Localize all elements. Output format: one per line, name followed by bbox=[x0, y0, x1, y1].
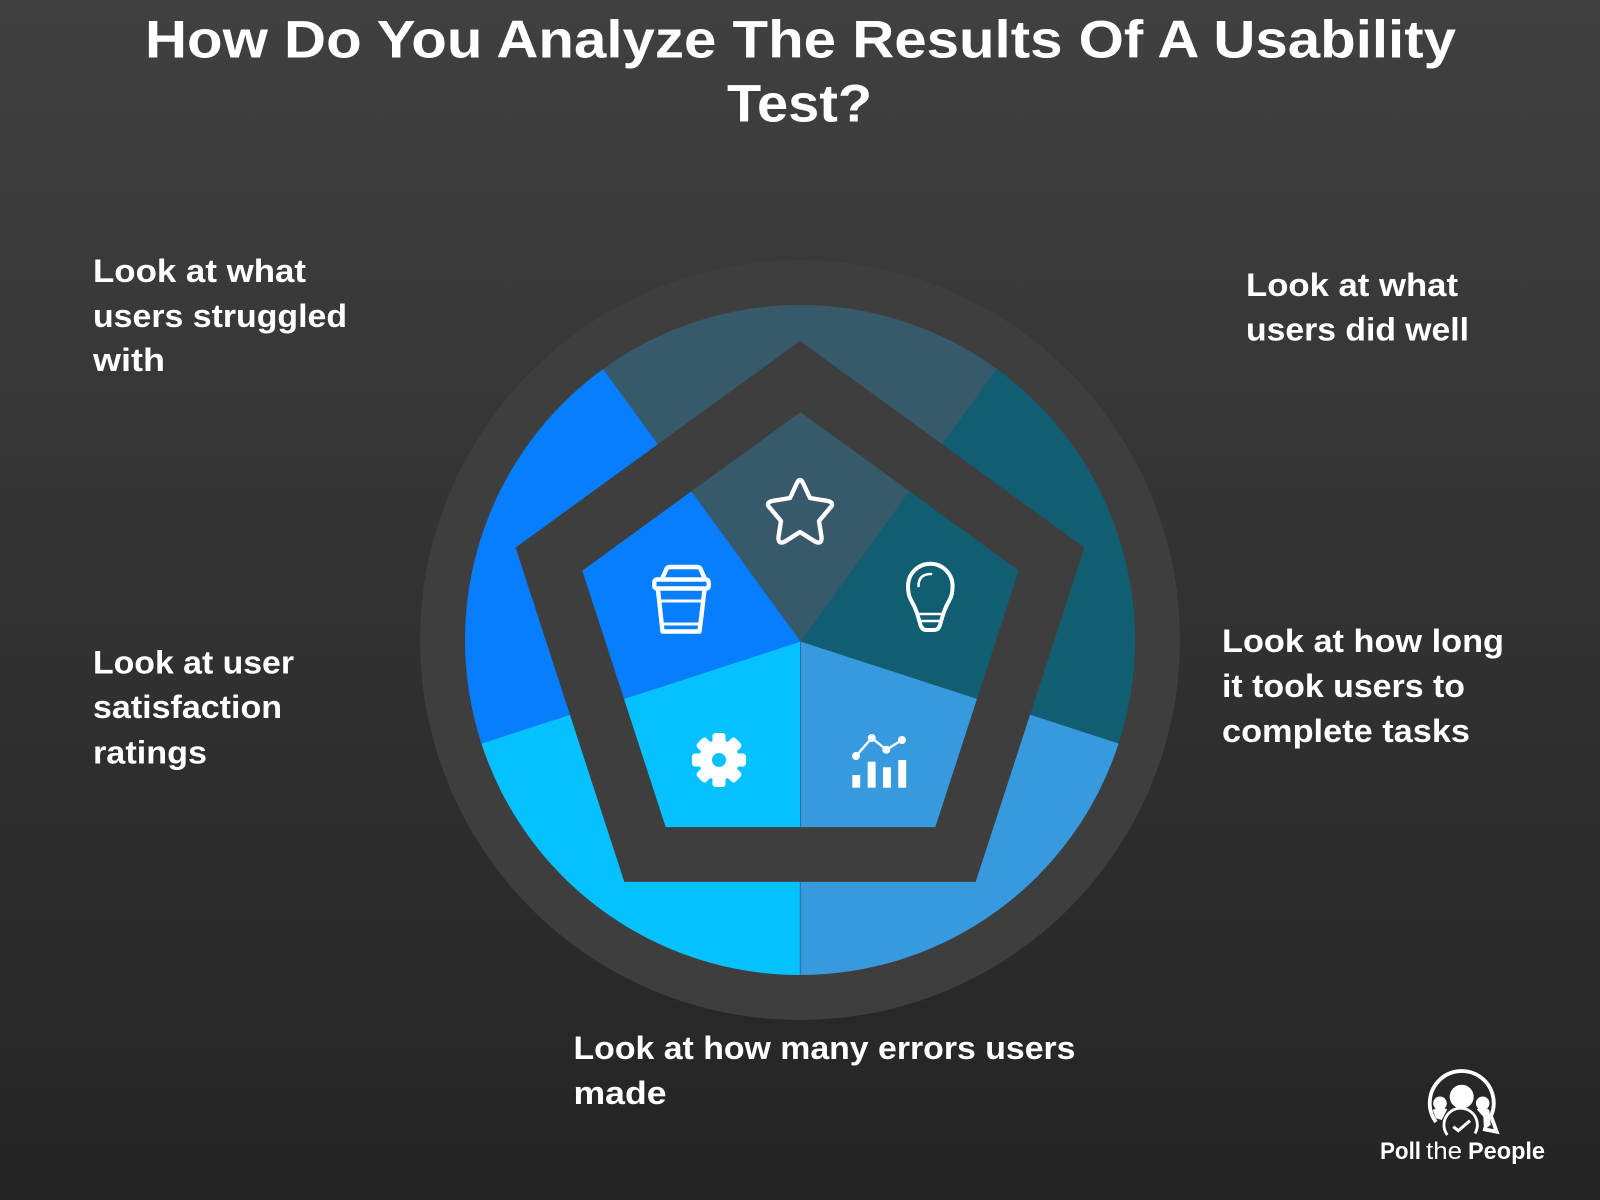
text: look at how long it took users to complete tasks: it took users to bbox=[1222, 668, 1465, 704]
pie slices: outer colour wheel bbox=[465, 305, 1135, 975]
icon: chart bbox=[852, 734, 906, 788]
text: look at user satisfaction ratings: ratings bbox=[93, 734, 207, 770]
icon: gear bbox=[692, 733, 746, 787]
text: look at how many errors users made: Look at how many errors users bbox=[574, 1030, 1076, 1066]
icon: light bulb bbox=[908, 564, 953, 630]
text: look at what users did well: Look at what bbox=[1246, 267, 1458, 303]
text: look at how many errors users made: made bbox=[574, 1075, 666, 1111]
title: How Do You Analyze The Results Of A Usability bbox=[145, 10, 1457, 70]
text: look at what users struggled with: Look at what bbox=[93, 253, 306, 289]
text: look at what users did well bbox=[1246, 267, 1469, 348]
text: look at how many errors users made bbox=[574, 1030, 1076, 1111]
logo wordmark: the bbox=[1426, 1138, 1462, 1165]
text: look at what users did well: users did well bbox=[1246, 312, 1469, 348]
logo wordmark: People bbox=[1468, 1138, 1545, 1165]
text: look at how long it took users to complete tasks bbox=[1222, 623, 1504, 749]
logo mark bbox=[1430, 1071, 1497, 1135]
text: look at user satisfaction ratings: satisfaction bbox=[93, 689, 282, 725]
text: look at how long it took users to complete tasks: Look at how long bbox=[1222, 623, 1504, 659]
outer ring bbox=[420, 260, 1180, 1020]
logo: Poll the People bbox=[1380, 1071, 1545, 1165]
dark pentagon band bbox=[516, 341, 1084, 882]
text: look at what users struggled with bbox=[92, 253, 347, 378]
title: Test? bbox=[727, 74, 872, 134]
icon: star bbox=[768, 480, 832, 543]
text: look at what users struggled with: users struggled bbox=[93, 298, 347, 334]
text: look at user satisfaction ratings: Look at user bbox=[93, 644, 294, 680]
text: look at how long it took users to complete tasks: complete tasks bbox=[1222, 713, 1470, 749]
text: look at what users struggled with: with bbox=[92, 342, 165, 378]
logo wordmark bbox=[1380, 1138, 1545, 1165]
logo wordmark: Poll bbox=[1380, 1138, 1421, 1165]
icon: coffee cup bbox=[654, 567, 709, 632]
inner pentagon segments bbox=[582, 412, 1019, 827]
title bbox=[145, 10, 1457, 134]
text: look at user satisfaction ratings bbox=[93, 644, 294, 770]
